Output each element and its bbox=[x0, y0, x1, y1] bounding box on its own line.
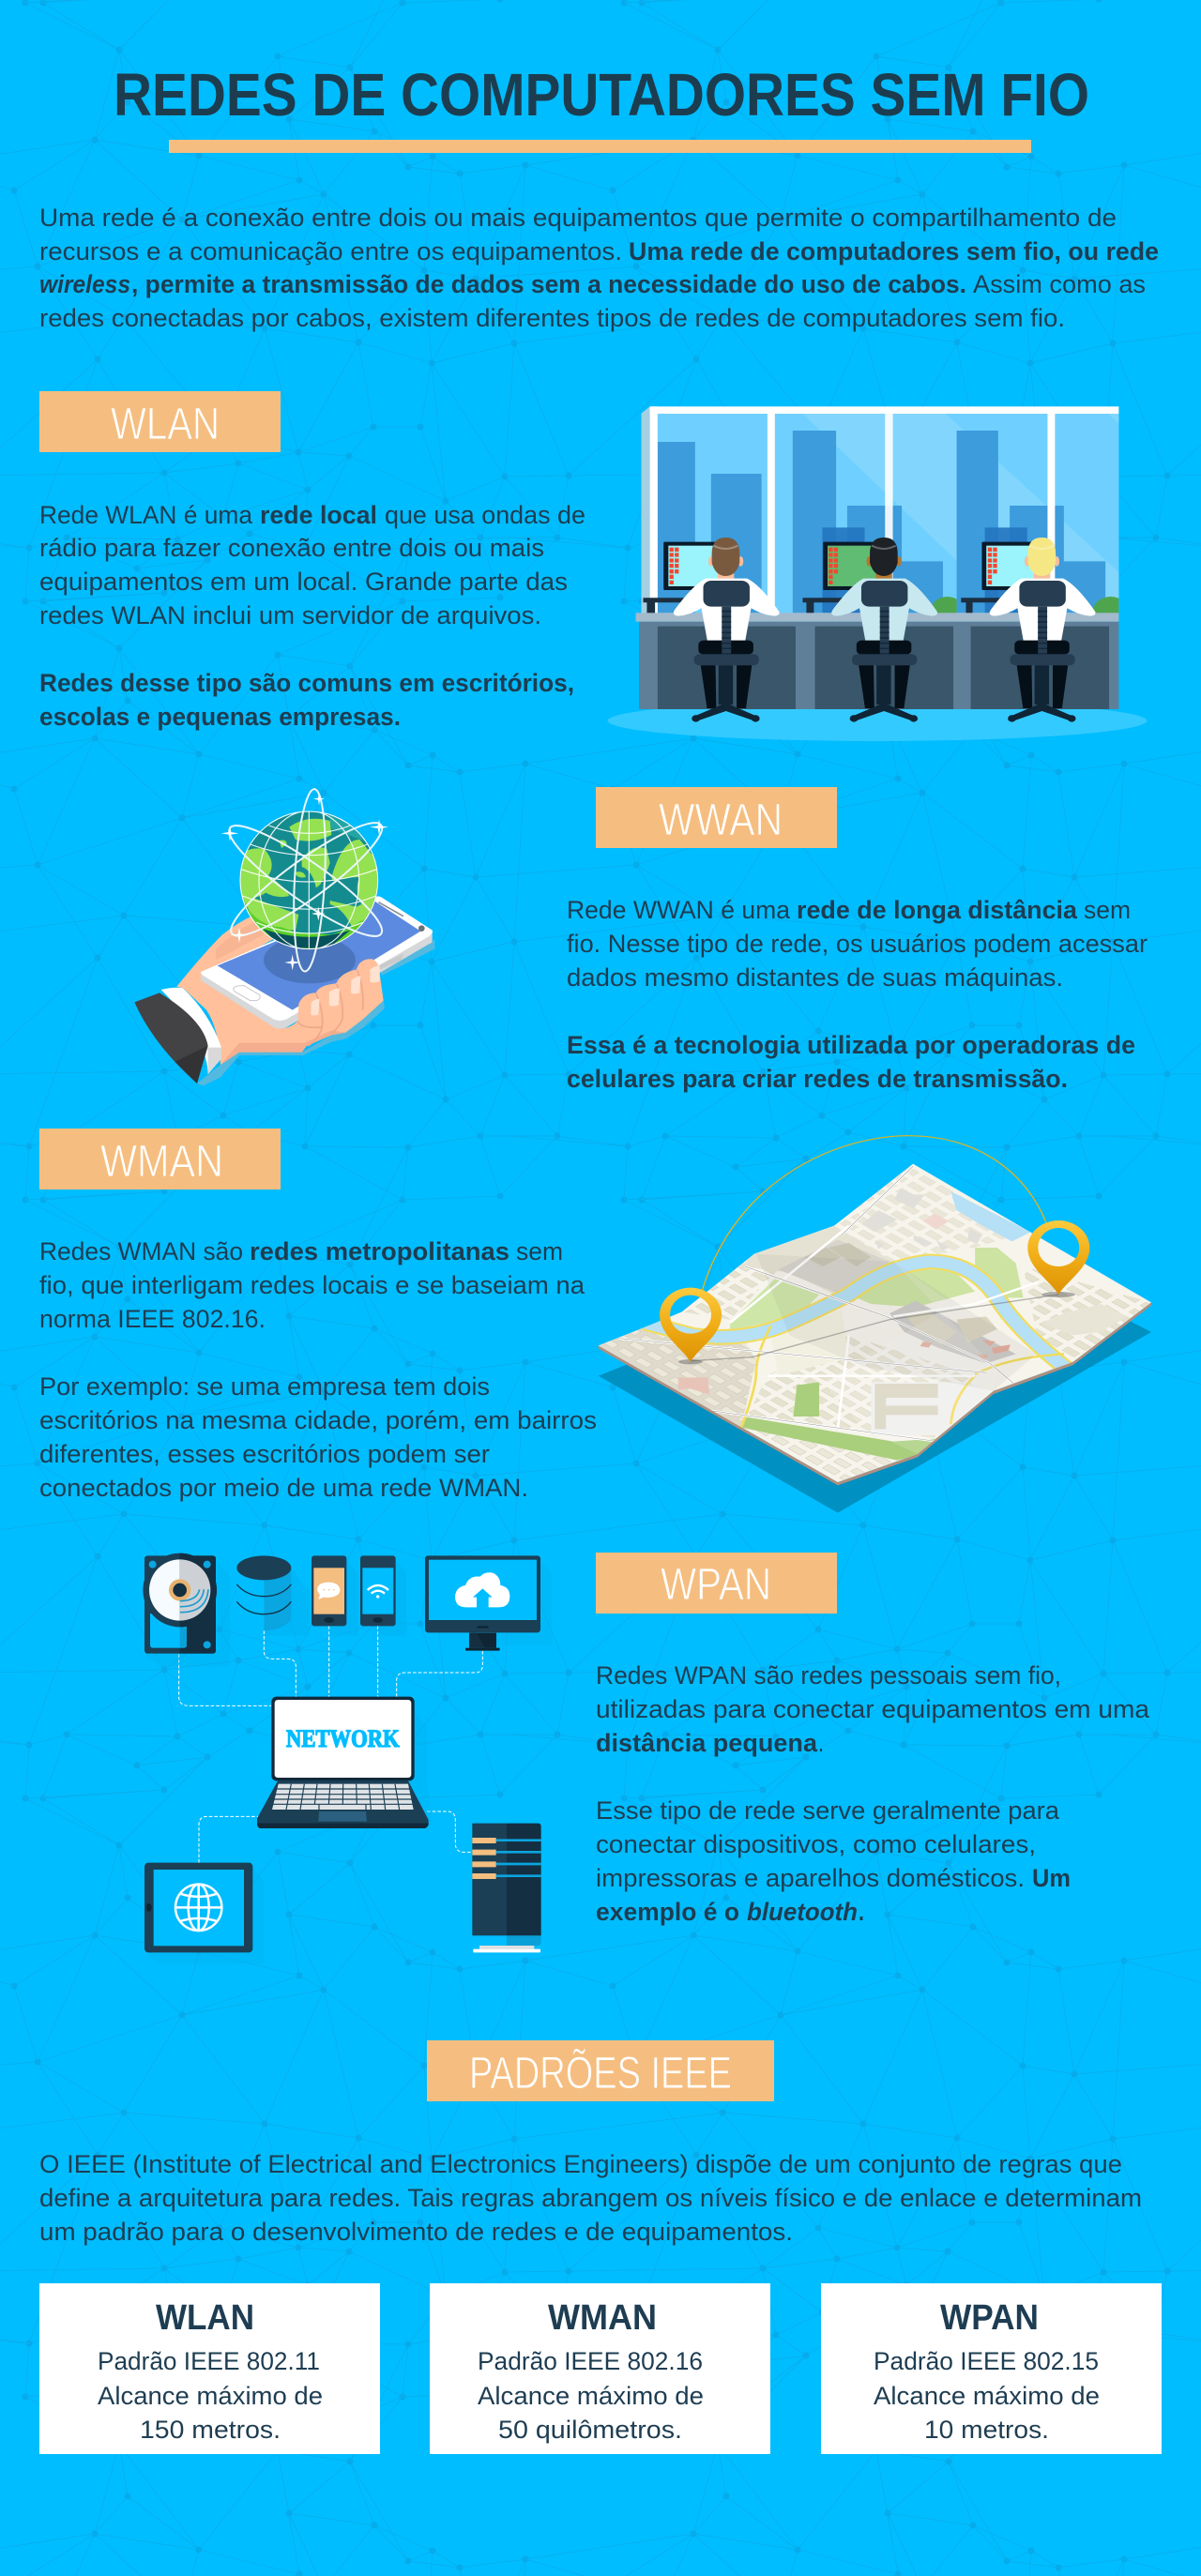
pin left bbox=[660, 1288, 722, 1362]
WWAN text: Rede WWAN é uma bbox=[567, 896, 790, 924]
card: WMAN bbox=[430, 2283, 770, 2454]
WPAN text bbox=[596, 1661, 1149, 1926]
dashed connections bbox=[179, 1626, 482, 1863]
WWAN text: dados mesmo distantes de suas máquinas. bbox=[567, 963, 1063, 992]
computers on back desk bbox=[643, 542, 1045, 614]
WLAN text: equipamentos em um local. Grande parte das bbox=[39, 568, 568, 596]
section label: WLAN bbox=[39, 391, 281, 452]
WPAN text: Redes WPAN são redes pessoais sem fio, bbox=[596, 1661, 1061, 1690]
intro text: recursos e a comunicação entre os equipamentos. bbox=[39, 237, 622, 265]
illustration: office with three people at computers bbox=[608, 406, 1147, 741]
intro text: redes conectadas por cabos, existem diferentes tipos de redes de computadores sem fio. bbox=[39, 304, 1065, 332]
WPAN text: distância pequena bbox=[596, 1729, 817, 1757]
fingers and palm bbox=[180, 959, 384, 1065]
IEEE text: um padrão para o desenvolvimento de redes e de equipamentos. bbox=[39, 2218, 793, 2246]
WMAN text: redes metropolitanas bbox=[250, 1237, 509, 1265]
WWAN text bbox=[567, 896, 1148, 1093]
card: WLAN bbox=[39, 2283, 380, 2454]
WLAN text: rede local bbox=[260, 501, 377, 529]
phone bbox=[201, 896, 433, 1029]
WWAN text: rede de longa distância bbox=[797, 896, 1077, 924]
WMAN text: escritórios na mesma cidade, porém, em bairros bbox=[39, 1406, 597, 1434]
hand shadow bbox=[197, 940, 434, 1085]
card: WLAN: WLAN bbox=[156, 2298, 254, 2338]
intro text bbox=[39, 204, 1159, 332]
WMAN text: conectados por meio de uma rede WMAN. bbox=[39, 1474, 528, 1502]
WLAN text bbox=[39, 501, 585, 731]
section label: WMAN: WMAN bbox=[100, 1137, 223, 1187]
card: WMAN: Padrão IEEE 802.16 bbox=[478, 2347, 703, 2375]
intro text: wireless bbox=[39, 270, 130, 298]
illustration: folded city map with two pins bbox=[582, 1136, 1163, 1513]
route shadow line bbox=[691, 1295, 1058, 1361]
card: WLAN: Padrão IEEE 802.11 bbox=[98, 2347, 320, 2375]
arc connecting pins bbox=[703, 1136, 1046, 1290]
WPAN text: utilizadas para conectar equipamentos em uma bbox=[596, 1695, 1149, 1723]
WWAN text: sem bbox=[1084, 896, 1131, 924]
title: REDES DE COMPUTADORES SEM FIO bbox=[114, 61, 1089, 129]
WPAN text: . bbox=[818, 1729, 824, 1757]
section label: WMAN bbox=[39, 1129, 281, 1190]
WPAN text: Esse tipo de rede serve geralmente para bbox=[596, 1796, 1059, 1825]
WLAN text: Rede WLAN é uma bbox=[39, 501, 252, 529]
WMAN text: sem bbox=[516, 1237, 563, 1265]
intro text: Uma rede é a conexão entre dois ou mais equipamentos que permite o compartilhamento de bbox=[39, 204, 1117, 232]
card: WPAN bbox=[821, 2283, 1162, 2454]
WLAN text: escolas e pequenas empresas. bbox=[39, 703, 401, 731]
icon: database bbox=[236, 1555, 310, 1635]
map sheet bbox=[599, 1163, 1151, 1482]
WMAN text: norma IEEE 802.16. bbox=[39, 1305, 266, 1333]
WLAN text: que usa ondas de bbox=[385, 501, 585, 529]
WWAN text: Essa é a tecnologia utilizada por operadoras de bbox=[567, 1031, 1135, 1059]
globe bbox=[219, 788, 392, 972]
section label: WWAN: WWAN bbox=[659, 796, 783, 845]
card: WLAN: 150 metros. bbox=[140, 2416, 281, 2444]
person 2 bbox=[831, 538, 937, 722]
section label: WLAN: WLAN bbox=[111, 400, 220, 449]
section label: WPAN bbox=[596, 1553, 837, 1614]
card: WMAN: Alcance máximo de bbox=[478, 2382, 704, 2410]
intro text: , permite a transmissão de dados sem a necessidade do uso de cabos. bbox=[131, 270, 966, 298]
person 3 bbox=[990, 538, 1096, 722]
card: WMAN: WMAN bbox=[548, 2298, 657, 2338]
card: WPAN: Alcance máximo de bbox=[874, 2382, 1100, 2410]
card: WPAN: 10 metros. bbox=[924, 2416, 1049, 2444]
WMAN text: Redes WMAN são bbox=[39, 1237, 243, 1265]
WPAN text: conectar dispositivos, como celulares, bbox=[596, 1830, 1036, 1858]
WPAN text: exemplo é o bbox=[596, 1898, 739, 1926]
sleeve bbox=[134, 993, 208, 1083]
title underline bar bbox=[169, 140, 1031, 153]
shirt cuff bbox=[161, 988, 221, 1074]
person 1 bbox=[674, 538, 780, 722]
WPAN text: . bbox=[859, 1898, 864, 1926]
section label: Padrões IEEE bbox=[427, 2040, 774, 2101]
floor ellipse bbox=[608, 701, 1147, 741]
WWAN text: fio. Nesse tipo de rede, os usuários podem acessar bbox=[567, 930, 1148, 958]
icon: hard disk bbox=[143, 1553, 230, 1667]
icon: tablet with globe bbox=[144, 1863, 265, 1963]
WLAN text: redes WLAN inclui um servidor de arquivos. bbox=[39, 601, 541, 629]
WPAN text: Um bbox=[1032, 1864, 1071, 1892]
WWAN text: celulares para criar redes de transmissão. bbox=[567, 1065, 1068, 1093]
window bbox=[641, 406, 1129, 630]
icon: laptop bbox=[257, 1697, 432, 1828]
section label: Padrões IEEE: PADRÕES IEEE bbox=[469, 2048, 732, 2099]
illustration: hand holding phone with globe bbox=[134, 788, 434, 1085]
counter bbox=[636, 613, 1118, 709]
river and roads bbox=[645, 1262, 1068, 1370]
card: WLAN: Alcance máximo de bbox=[98, 2382, 323, 2410]
intro text: Assim como as bbox=[973, 270, 1146, 298]
card: WPAN: Padrão IEEE 802.15 bbox=[874, 2347, 1099, 2375]
icon: monitor with cloud upload bbox=[425, 1555, 552, 1651]
icon: phone with wifi bbox=[360, 1555, 406, 1635]
pin right bbox=[1027, 1220, 1089, 1295]
WLAN text: rádio para fazer conexão entre dois ou mais bbox=[39, 534, 544, 562]
IEEE text bbox=[39, 2150, 1142, 2246]
IEEE text: O IEEE (Institute of Electrical and Electronics Engineers) dispõe de um conjunto de regras que bbox=[39, 2150, 1122, 2178]
card: WPAN: WPAN bbox=[940, 2298, 1039, 2338]
WLAN text: Redes desse tipo são comuns em escritórios, bbox=[39, 669, 574, 697]
WMAN text: Por exemplo: se uma empresa tem dois bbox=[39, 1372, 490, 1401]
laptop screen label: NETWORK bbox=[286, 1725, 400, 1752]
WMAN text: diferentes, esses escritórios podem ser bbox=[39, 1440, 490, 1468]
thumb behind phone bbox=[176, 917, 275, 994]
WMAN text: fio, que interligam redes locais e se baseiam na bbox=[39, 1271, 585, 1299]
WPAN text: impressoras e aparelhos domésticos. bbox=[596, 1864, 1025, 1892]
WPAN text: bluetooth bbox=[747, 1898, 858, 1926]
map edge bbox=[599, 1302, 1151, 1485]
intro text: Uma rede de computadores sem fio, ou rede bbox=[629, 237, 1159, 265]
map shadow bbox=[599, 1320, 1151, 1513]
section label: WPAN: WPAN bbox=[661, 1560, 771, 1610]
IEEE text: define a arquitetura para redes. Tais regras abrangem os níveis físico e de enlace e determinam bbox=[39, 2184, 1142, 2212]
icon: phone with chat bbox=[312, 1555, 358, 1635]
section label: WWAN bbox=[596, 787, 837, 848]
WMAN text bbox=[39, 1237, 597, 1502]
icon: server tower bbox=[472, 1824, 541, 1952]
illustration: network of devices bbox=[143, 1553, 552, 1963]
card: WMAN: 50 quilômetros. bbox=[498, 2416, 682, 2444]
